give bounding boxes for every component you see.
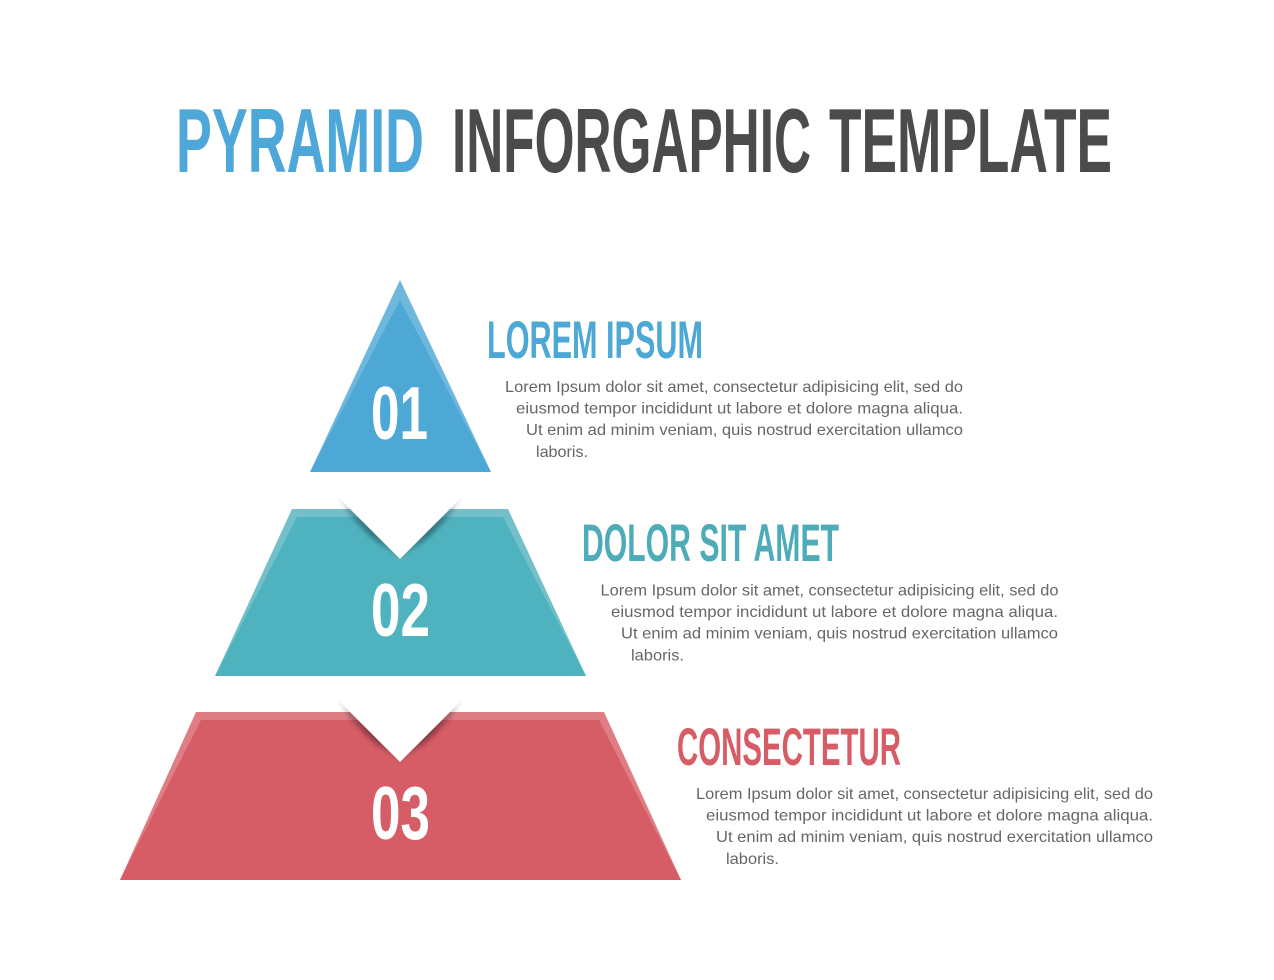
panel: pyramid tier 2 bbox=[215, 485, 586, 676]
tier 3 notch shadow bbox=[337, 696, 463, 760]
panel: pyramid tier 1 bbox=[310, 280, 491, 472]
title bbox=[176, 91, 1112, 192]
tier 2 face bbox=[215, 517, 586, 676]
body 1: Lorem Ipsum dolor sit amet, consectetur adipisicing elit, sed do bbox=[505, 379, 963, 396]
tier 1 number: 01 bbox=[371, 371, 428, 455]
tier 3 face bbox=[120, 720, 681, 880]
heading 1: LOREM IPSUM bbox=[487, 311, 703, 370]
body 3: laboris. bbox=[726, 851, 779, 868]
panel: pyramid tier 3 bbox=[120, 688, 681, 880]
body 2: laboris. bbox=[631, 648, 684, 664]
body 1: Ut enim ad minim veniam, quis nostrud exercitation ullamco bbox=[526, 422, 963, 439]
text block 2 bbox=[582, 514, 1059, 664]
tier 3 white notch bbox=[330, 688, 470, 762]
body 1: laboris. bbox=[536, 444, 588, 461]
title: accent word: PYRAMID bbox=[176, 91, 424, 192]
tier 2 number: 02 bbox=[371, 568, 430, 652]
body 3 bbox=[696, 786, 1153, 868]
heading 3: CONSECTETUR bbox=[677, 718, 901, 777]
tier 3 number: 03 bbox=[371, 771, 430, 855]
title: second word: INFORGAPHIC bbox=[452, 91, 811, 192]
text block 1 bbox=[487, 311, 963, 461]
tier 2 notch shadow bbox=[337, 493, 463, 557]
tier 1 light edge bbox=[310, 280, 491, 472]
tier 2 white notch bbox=[330, 485, 470, 559]
tier 2 light edge bbox=[215, 509, 586, 676]
heading 2: DOLOR SIT AMET bbox=[582, 514, 839, 573]
body 3: Ut enim ad minim veniam, quis nostrud exercitation ullamco bbox=[716, 829, 1153, 846]
text block 3 bbox=[677, 718, 1153, 868]
body 2 bbox=[600, 582, 1059, 664]
body 1: eiusmod tempor incididunt ut labore et dolore magna aliqua. bbox=[516, 400, 963, 418]
tier 1 face bbox=[310, 300, 491, 472]
body 2: Ut enim ad minim veniam, quis nostrud exercitation ullamco bbox=[621, 626, 1058, 642]
body 2: Lorem Ipsum dolor sit amet, consectetur adipisicing elit, sed do bbox=[600, 582, 1059, 600]
body 2: eiusmod tempor incididunt ut labore et dolore magna aliqua. bbox=[611, 604, 1058, 621]
body 3: eiusmod tempor incididunt ut labore et dolore magna aliqua. bbox=[706, 808, 1153, 824]
body 3: Lorem Ipsum dolor sit amet, consectetur adipisicing elit, sed do bbox=[696, 786, 1153, 803]
body 1 bbox=[505, 379, 963, 461]
tier 3 light edge bbox=[120, 712, 681, 880]
